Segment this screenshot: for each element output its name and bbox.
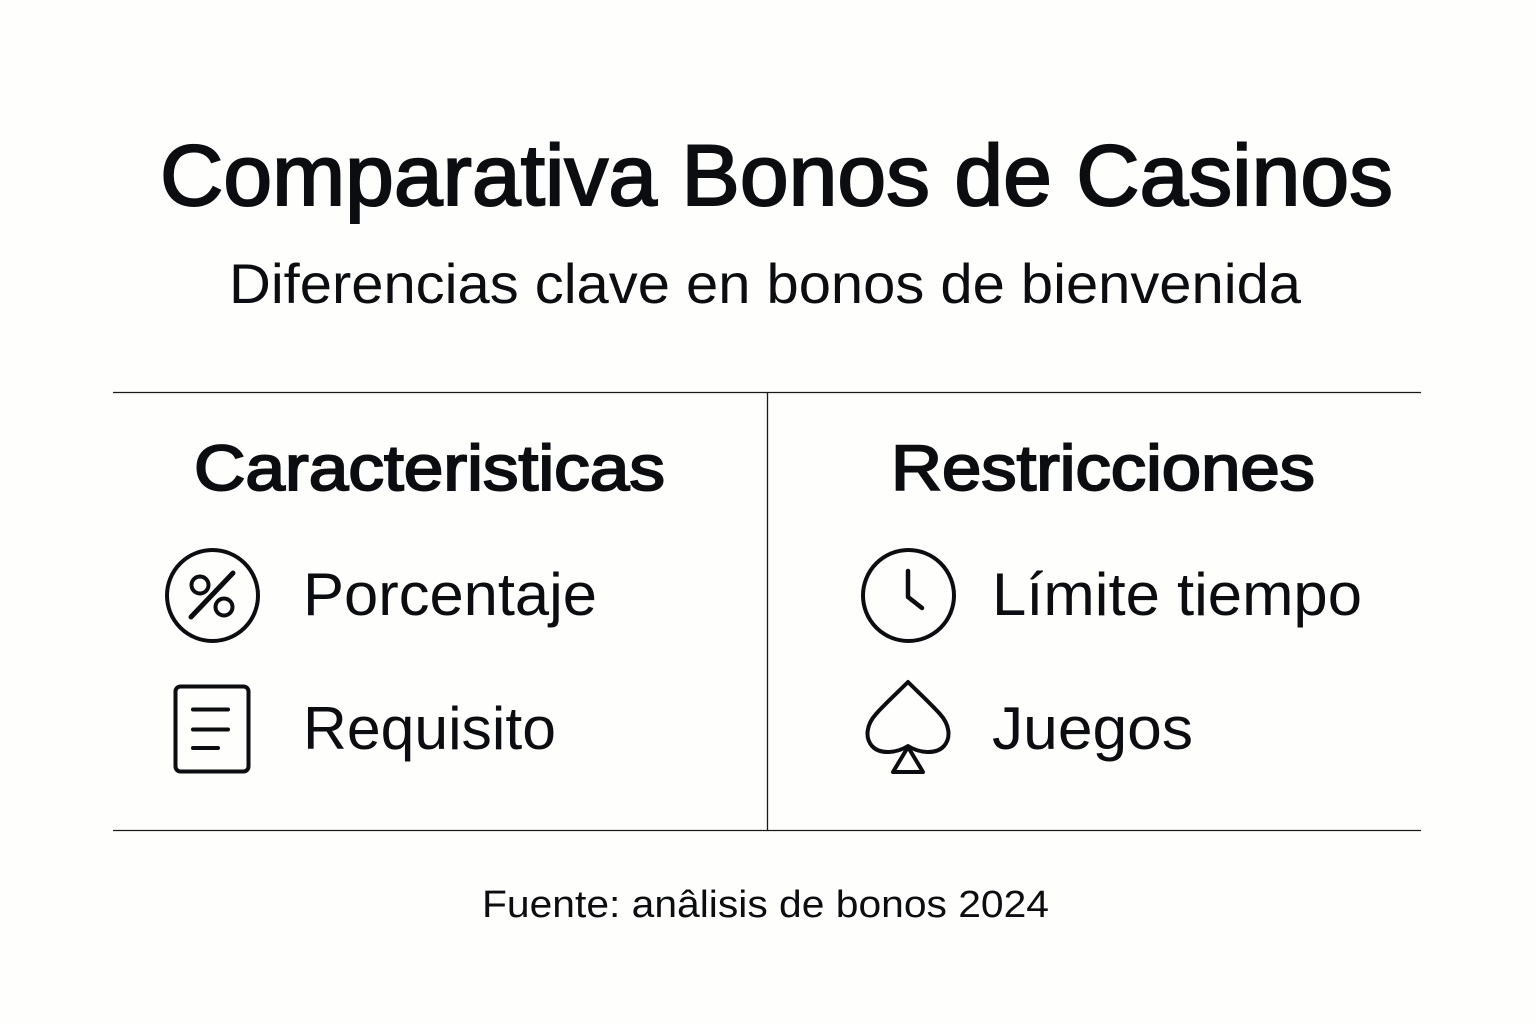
panel: restricciones xyxy=(863,432,1362,772)
icon: document xyxy=(176,686,248,772)
title: Comparativa Bonos de Casinos xyxy=(160,128,1393,224)
heading: restricciones: Restricciones xyxy=(891,432,1315,504)
label: requisito: Requisito xyxy=(303,695,556,762)
source note: Fuente: anâlisis de bonos 2024 xyxy=(482,884,1049,926)
icon: spade xyxy=(867,682,949,772)
icon: clock xyxy=(863,550,954,641)
icon: percent xyxy=(167,550,258,641)
panel: características xyxy=(167,432,665,772)
heading: características: Caracteristicas xyxy=(194,432,665,504)
label: juegos: Juegos xyxy=(992,695,1193,762)
label: porcentaje: Porcentaje xyxy=(303,561,597,628)
subtitle: Diferencias clave en bonos de bienvenida xyxy=(229,252,1302,315)
table frame xyxy=(113,392,1421,830)
label: límite tiempo: Límite tiempo xyxy=(992,561,1362,628)
